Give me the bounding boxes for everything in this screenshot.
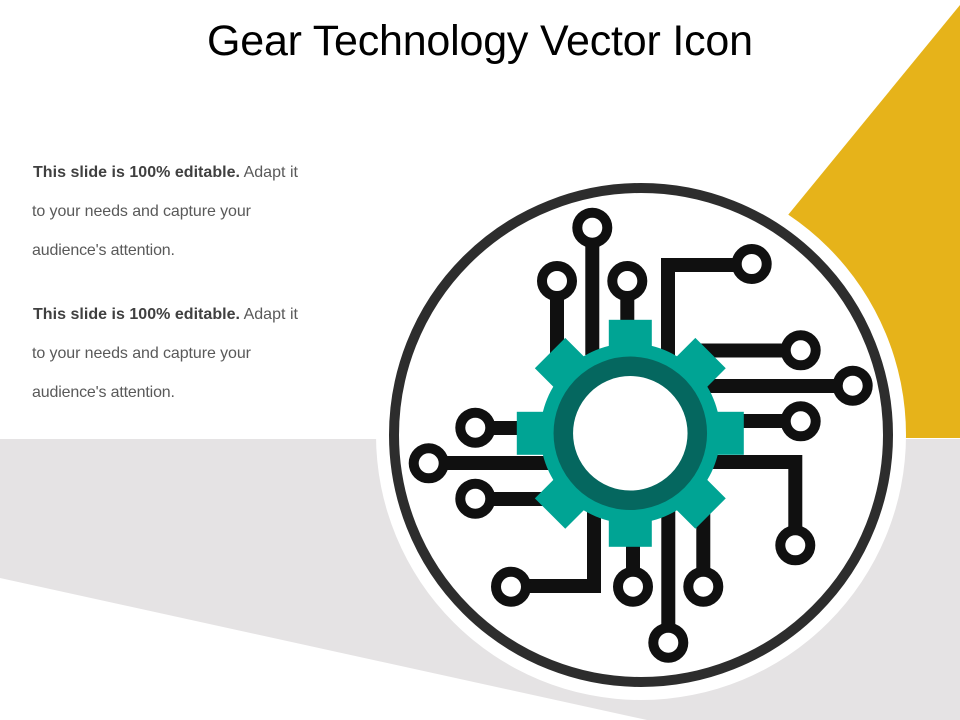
text block: second paragraph: to your needs and capture your [32,345,252,362]
background shape: yellow triangle [700,5,960,438]
text block: second paragraph: This slide is 100% editable. Adapt it [33,306,299,323]
badge ring [394,188,888,682]
text block: first paragraph: This slide is 100% editable. Adapt it [33,164,299,181]
text block: first paragraph: audience's attention. [32,242,175,259]
title: Gear Technology Vector Icon [207,17,753,65]
circular badge with gear circuit icon [394,188,888,682]
text block: second paragraph: audience's attention. [32,384,175,401]
icon: circuit nodes [414,213,868,658]
text block: first paragraph: to your needs and capture your [32,203,252,220]
background shape: grey band [0,439,960,720]
icon: circuit traces [442,240,842,630]
text block: first paragraph [32,164,299,259]
white halo around circle [376,170,906,700]
icon: gear [517,320,744,547]
text block: second paragraph [32,306,299,401]
